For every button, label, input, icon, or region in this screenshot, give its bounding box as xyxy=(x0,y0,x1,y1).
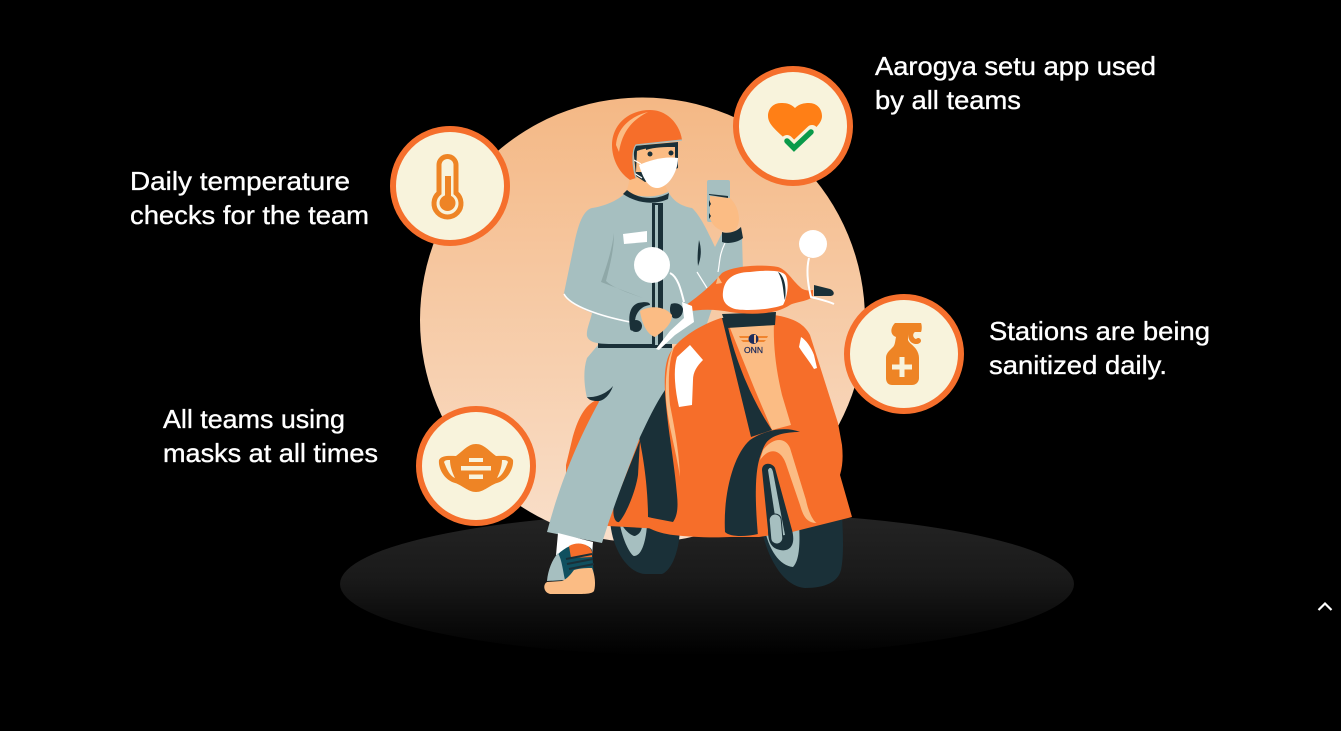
text: masks at all times: masks at all times xyxy=(163,438,378,468)
phone and hand xyxy=(707,180,743,243)
face mask xyxy=(639,157,678,188)
jacket sleeve white line xyxy=(564,294,630,322)
badge: face mask xyxy=(419,409,533,523)
fender highlight xyxy=(760,440,817,523)
badge: heart with check xyxy=(736,69,850,183)
text: Aarogya setu app xyxy=(875,51,1156,115)
left mirror, grip and hand xyxy=(629,247,694,350)
text: stations sanitized: sanitized daily. xyxy=(989,350,1167,380)
ONN logo xyxy=(739,334,768,355)
scooter handlebar and headlight xyxy=(686,266,813,314)
dark inner panels xyxy=(639,385,690,524)
text: Aarogya setu app: by all teams xyxy=(875,85,1021,115)
zip xyxy=(652,203,663,345)
arm fold xyxy=(698,240,701,266)
text: daily temperature checks: Daily temperature xyxy=(130,166,350,196)
icon: thermometer xyxy=(434,156,461,217)
rear fender xyxy=(566,385,690,530)
icon: check mark xyxy=(787,131,812,148)
badge: thermometer xyxy=(393,129,507,243)
ground shadow ellipse xyxy=(340,512,1074,656)
text: daily temperature checks: checks for the team xyxy=(130,200,369,230)
rider jacket xyxy=(564,191,743,345)
rear wheel xyxy=(610,520,680,574)
left highlight strip xyxy=(666,345,680,477)
rider shoe xyxy=(544,533,595,594)
dark centre stripe xyxy=(722,315,775,437)
jacket crease xyxy=(601,233,643,298)
centre peach panel xyxy=(728,321,791,430)
icon: heart xyxy=(768,103,822,148)
right mirror and grip xyxy=(799,230,834,304)
fork xyxy=(762,464,793,550)
collar under headlight xyxy=(722,312,776,328)
scooter front body xyxy=(647,312,852,550)
ONN logo: ONN xyxy=(744,346,763,355)
right white highlight xyxy=(799,337,817,369)
badge: spray bottle xyxy=(847,297,961,411)
large peach background circle xyxy=(420,98,865,542)
text: stations sanitized: Stations are being xyxy=(989,316,1210,346)
icon: scroll up chevron xyxy=(1318,604,1332,610)
name tag xyxy=(623,231,647,244)
front wheel xyxy=(760,515,843,588)
helmet xyxy=(612,110,682,180)
icon: face mask xyxy=(439,444,513,492)
text: Aarogya setu app: Aarogya setu app used xyxy=(875,51,1156,81)
left white highlight xyxy=(675,345,703,407)
icon: spray bottle xyxy=(886,323,922,385)
rider head xyxy=(612,110,682,203)
front fender arch xyxy=(725,429,800,536)
text: masks at all times xyxy=(163,404,378,468)
rider trousers xyxy=(547,343,673,543)
text: daily temperature checks xyxy=(130,166,369,230)
text: masks at all times: All teams using xyxy=(163,404,345,434)
front fender xyxy=(756,439,815,536)
illustration: rider on orange scooter xyxy=(544,110,852,594)
text: stations sanitized xyxy=(989,316,1210,380)
